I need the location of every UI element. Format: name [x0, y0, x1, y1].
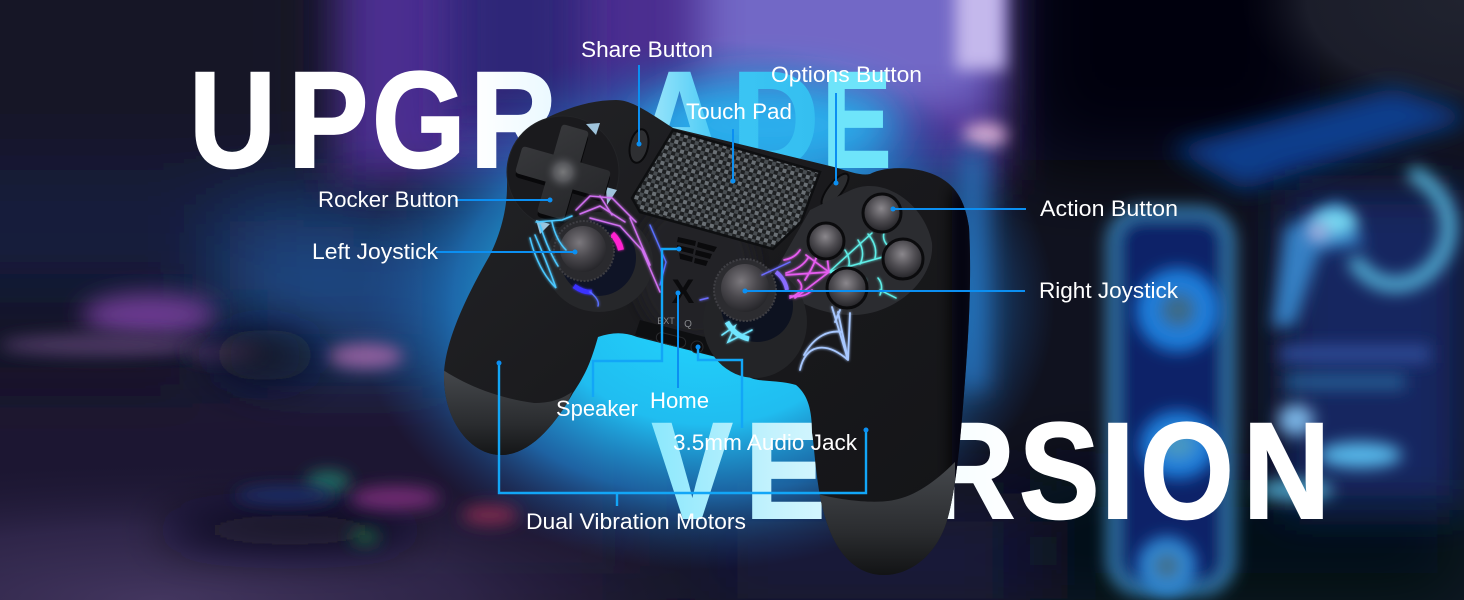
headset mark: Q	[684, 319, 692, 330]
upper cyan glow behind touch pad	[640, 83, 900, 167]
bottom ports	[655, 332, 703, 353]
touch pad	[632, 130, 820, 249]
callout line: action button	[890, 206, 1026, 212]
label: home: Home	[650, 388, 709, 413]
top right corner	[1240, 0, 1464, 130]
heading: VERSION: VERSION	[652, 395, 1330, 548]
label: touch pad: Touch Pad	[686, 99, 792, 124]
share button	[627, 128, 651, 164]
label: rocker button: Rocker Button	[318, 187, 459, 212]
EXT mark: EXT	[657, 316, 675, 326]
callout line: speaker	[593, 246, 682, 397]
right joystick	[703, 259, 807, 378]
callout line: options button	[834, 93, 838, 186]
X logo: X	[672, 273, 695, 311]
label: speaker: Speaker	[556, 396, 638, 421]
controller body	[444, 100, 970, 575]
action button pad	[770, 186, 932, 315]
callout line: left joystick	[436, 250, 578, 254]
neon web: right	[700, 233, 896, 370]
callout line: right joystick	[742, 288, 1025, 294]
neon web: left	[530, 196, 666, 306]
label: audio jack: 3.5mm Audio Jack	[673, 430, 858, 455]
d-pad disc	[507, 116, 619, 228]
blurred keyboard on desk	[0, 293, 518, 548]
body shading and grip caps	[440, 190, 972, 590]
blurred PC tower with fans	[1112, 88, 1464, 590]
left joystick	[545, 212, 653, 312]
callout line: touch pad	[730, 129, 736, 184]
label: dual vibration motors: Dual Vibration Motors	[526, 509, 746, 534]
heading: UPGRADE: UPGRAD	[189, 44, 819, 197]
options button	[817, 170, 853, 210]
label: right joystick: Right Joystick	[1039, 278, 1179, 303]
d-pad arrows	[518, 123, 617, 234]
callout bracket: dual vibration motors	[496, 360, 868, 506]
action buttons	[808, 194, 923, 308]
label: share button: Share Button	[581, 37, 713, 62]
purple monitor glow	[335, 0, 1007, 390]
floor tone	[0, 430, 720, 600]
label: action button: Action Button	[1040, 196, 1178, 221]
callout line: share button	[636, 65, 642, 146]
game controller	[440, 100, 972, 590]
callout line: rocker button	[455, 198, 552, 202]
d-pad cross	[505, 115, 621, 233]
callout line: audio jack	[696, 344, 742, 428]
callout line: home	[676, 290, 680, 388]
speaker grill	[677, 237, 717, 266]
label: options button: Options Button	[771, 62, 922, 87]
central cyan glow	[355, 40, 1055, 570]
heading: UPGRADE: E	[822, 43, 891, 196]
label: left joystick: Left Joystick	[312, 239, 439, 264]
